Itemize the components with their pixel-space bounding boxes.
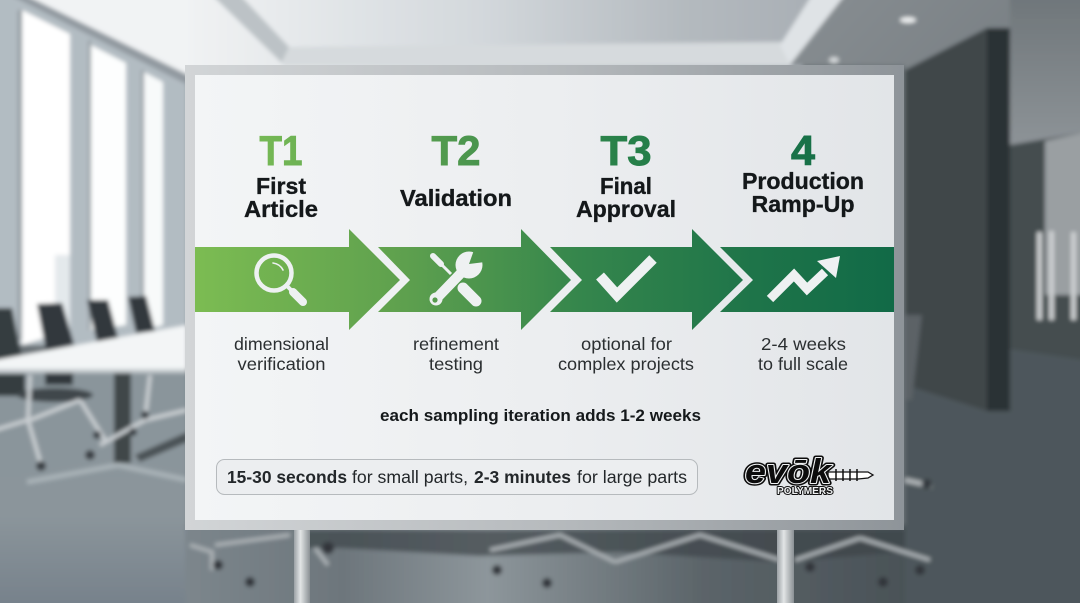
- step descriptions: [234, 334, 848, 374]
- logo: evok polymers: evōk: [745, 453, 833, 491]
- iteration note: each sampling iteration adds 1-2 weeks: [380, 407, 701, 425]
- floor: [0, 372, 187, 603]
- step numbers: T3: [600, 127, 652, 174]
- board frame: [185, 65, 904, 530]
- right wall: [905, 28, 987, 411]
- step numbers: T1: [260, 127, 302, 174]
- logo: evok polymers: evōk: [745, 453, 833, 491]
- logo: evok polymers: POLYMERS: [777, 486, 833, 497]
- icon: wrench and screwdriver: [430, 250, 492, 306]
- step titles: Validation: [400, 185, 512, 211]
- arrow band: [195, 229, 894, 330]
- left windows: [0, 0, 187, 345]
- step titles: Article: [244, 196, 318, 222]
- cycle time callout: 2-3 minutes: [474, 467, 571, 487]
- logo: evok polymers: [745, 453, 873, 497]
- step titles: Production: [742, 168, 864, 194]
- right stand leg: [777, 530, 794, 603]
- table: [0, 325, 187, 372]
- step descriptions: dimensional: [234, 334, 329, 354]
- chair bases below board: [190, 535, 930, 570]
- step titles: First: [256, 173, 306, 199]
- step descriptions: complex projects: [558, 354, 694, 374]
- step descriptions: testing: [429, 354, 483, 374]
- board surface: [195, 75, 894, 520]
- cycle time callout: [216, 460, 698, 494]
- cycle time callout: for large parts: [577, 467, 687, 487]
- step descriptions: optional for: [581, 334, 672, 354]
- cycle time callout: for small parts,: [352, 467, 468, 487]
- step descriptions: 2-4 weeks: [761, 334, 846, 354]
- step descriptions: to full scale: [758, 354, 848, 374]
- step numbers: [260, 127, 816, 174]
- icon: check mark: [600, 259, 653, 295]
- step titles: Ramp-Up: [752, 191, 854, 217]
- logo: evok polymers: evōk: [745, 453, 833, 491]
- step descriptions: refinement: [413, 334, 499, 354]
- icon: magnifying glass: [256, 256, 303, 302]
- left stand leg: [294, 530, 310, 603]
- step numbers: T2: [432, 127, 480, 174]
- step titles: Approval: [576, 196, 676, 222]
- step titles: Final: [600, 173, 652, 199]
- cycle time callout: 15-30 seconds: [227, 467, 347, 487]
- step numbers: 4: [791, 127, 816, 174]
- icon: rising trend arrow: [770, 256, 840, 299]
- step titles: [244, 168, 864, 222]
- step descriptions: verification: [238, 354, 326, 374]
- chairs: [0, 308, 22, 364]
